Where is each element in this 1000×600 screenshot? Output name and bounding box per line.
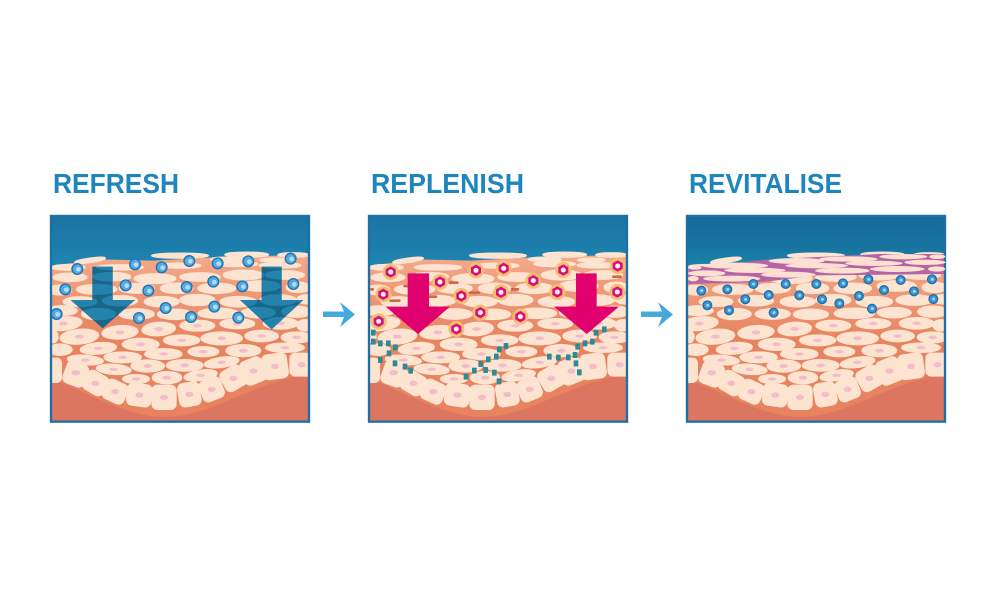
replenish overlays — [370, 258, 626, 384]
panel: refresh skin diagram — [44, 215, 316, 423]
revitalise barrier layer and molecules — [688, 254, 946, 318]
blue water molecules — [51, 253, 299, 324]
panel: replenish skin diagram — [362, 215, 634, 423]
teal peptide chains — [371, 326, 607, 384]
heading: Replenish: REPLENISH — [371, 168, 524, 199]
brown streaks — [370, 275, 622, 302]
blue molecules — [696, 274, 938, 318]
icon: pink downward arrows — [386, 273, 619, 334]
heading: Revitalise: REVITALISE — [689, 168, 842, 199]
icon: blue downward arrows — [70, 266, 304, 330]
panel: revitalise skin diagram — [680, 215, 952, 423]
purple barrier cells — [688, 254, 946, 284]
pink molecules — [371, 258, 626, 337]
heading: Refresh: REFRESH — [53, 168, 179, 199]
arrow: refresh to replenish — [323, 302, 355, 327]
arrow: replenish to revitalise — [641, 302, 673, 327]
